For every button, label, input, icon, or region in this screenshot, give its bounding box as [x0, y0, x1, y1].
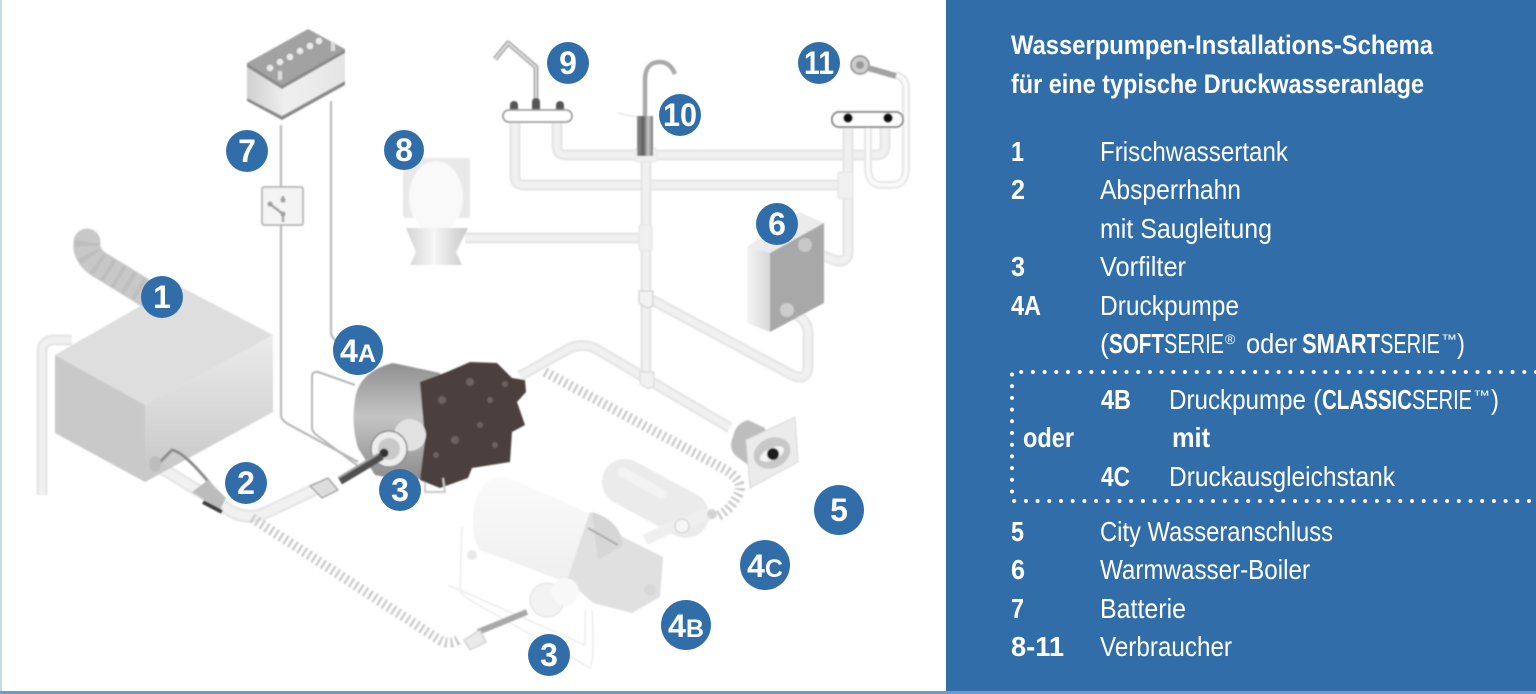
icon: pressure pump 4B	[448, 477, 663, 668]
legend item 4C: Druckausgleichstank	[1169, 461, 1395, 492]
legend item 3: 3	[1011, 251, 1025, 282]
panel: diagram background	[0, 0, 946, 694]
legend item 4B: ™	[1473, 387, 1490, 403]
legend item 4C: 4C	[1101, 461, 1130, 492]
legend item 4A: SMART	[1302, 328, 1380, 359]
panel: legend background	[946, 0, 1536, 694]
badge 4A	[333, 325, 383, 375]
badge 7	[226, 130, 268, 172]
badge 3 top: 3	[391, 472, 409, 508]
badge 6: 6	[768, 206, 786, 242]
badge 8	[384, 130, 424, 170]
legend item 8-11	[1011, 631, 1232, 662]
badge 4C: 4C	[747, 548, 783, 584]
legend item 4A	[1011, 290, 1465, 359]
connector: mit: mit	[1172, 422, 1210, 453]
diagram: water system illustration	[42, 29, 906, 668]
badge 1	[141, 276, 183, 318]
legend item 4A: (	[1100, 328, 1109, 359]
legend item 1: Frischwassertank	[1100, 136, 1288, 167]
badge 6	[756, 203, 798, 245]
legend item 4A: SERIE	[1164, 328, 1224, 359]
badge 10: 10	[663, 97, 697, 133]
legend item 7	[1011, 593, 1186, 624]
legend item 8-11: 8-11	[1011, 631, 1064, 662]
legend item 4A: SOFT	[1109, 328, 1164, 359]
legend list	[1011, 136, 1536, 662]
panel edge: left line	[0, 0, 2, 694]
badge 1: 1	[153, 279, 171, 315]
legend item 4B: SERIE	[1412, 384, 1472, 415]
badge 11	[798, 42, 840, 84]
legend item 5	[1011, 516, 1333, 547]
badge 3 bottom: 3	[540, 637, 558, 673]
legend item 4B: 4B	[1101, 384, 1131, 415]
legend item 4A: SERIE	[1380, 328, 1440, 359]
icon: pressure pump 4A	[310, 362, 526, 498]
bottom edge line	[0, 691, 1536, 694]
legend item 1: 1	[1011, 136, 1024, 167]
icon: faucet 9	[495, 43, 572, 122]
legend item 4A: ™	[1441, 331, 1457, 347]
legend item 4B: CLASSIC	[1322, 384, 1412, 415]
legend item 6: 6	[1011, 554, 1025, 585]
legend item 4A: ®	[1225, 331, 1236, 347]
legend item 4A: )	[1457, 328, 1465, 359]
badge 5	[814, 485, 864, 535]
icon: battery	[247, 29, 345, 120]
legend item 4A: oder	[1246, 328, 1297, 359]
icon: pressure tank 4C	[622, 472, 717, 540]
legend item 2: mit Saugleitung	[1100, 213, 1272, 244]
legend item 2: 2	[1011, 174, 1025, 205]
badge 3 top	[379, 469, 421, 511]
badge 9: 9	[559, 45, 577, 81]
badge 2	[225, 462, 267, 504]
legend heading: für eine typische Druckwasseranlage	[1011, 69, 1424, 99]
badge 4C	[740, 540, 790, 590]
badge 3 bottom	[528, 634, 570, 676]
wires	[281, 101, 358, 466]
legend item 4B: )	[1491, 384, 1499, 415]
alternative: oder: oder	[1023, 422, 1074, 453]
badge 11: 11	[804, 45, 834, 81]
icon: switch	[262, 187, 303, 225]
badge 2: 2	[237, 465, 255, 501]
legend item 2: Absperrhahn	[1100, 174, 1241, 205]
legend item 3: Vorfilter	[1100, 251, 1186, 282]
legend heading: Wasserpumpen-Installations-Schema	[1011, 30, 1433, 60]
legend item 6	[1011, 554, 1310, 585]
icon: city water connection	[731, 417, 798, 488]
icon: shut-off valve	[149, 450, 226, 512]
icon: boiler	[747, 212, 824, 332]
badge 8: 8	[395, 132, 413, 168]
hatched suction hose	[252, 372, 740, 643]
icon: toilet	[403, 158, 470, 265]
water pipes	[42, 75, 906, 516]
badge 4B: 4B	[668, 608, 704, 644]
legend item 4B: Druckpumpe	[1169, 384, 1306, 415]
icon: faucet 10	[618, 62, 675, 156]
legend item 7: 7	[1011, 593, 1024, 624]
legend item 4B	[1101, 384, 1499, 415]
dotted box	[1012, 372, 1536, 501]
badge 4A: 4A	[340, 333, 376, 369]
legend item 8-11: Verbraucher	[1100, 631, 1232, 662]
icon: fresh water tank	[55, 242, 273, 482]
legend item 1	[1011, 136, 1288, 167]
legend item 7: Batterie	[1100, 593, 1186, 624]
legend item 6: Warmwasser-Boiler	[1100, 554, 1310, 585]
legend item 4A: Druckpumpe	[1100, 290, 1239, 321]
legend item 2	[1011, 174, 1272, 244]
badge 5: 5	[830, 492, 848, 528]
legend item 4A: 4A	[1011, 290, 1041, 321]
legend item 4B: (	[1313, 384, 1322, 415]
legend heading	[1011, 30, 1433, 99]
badge 9	[547, 42, 589, 84]
legend item 5: City Wasseranschluss	[1100, 516, 1333, 547]
icon: shower	[832, 56, 903, 127]
legend item 3	[1011, 251, 1186, 282]
number badges	[141, 42, 864, 676]
badge 4B	[661, 600, 711, 650]
legend item 5: 5	[1011, 516, 1024, 547]
badge 7: 7	[238, 133, 256, 169]
